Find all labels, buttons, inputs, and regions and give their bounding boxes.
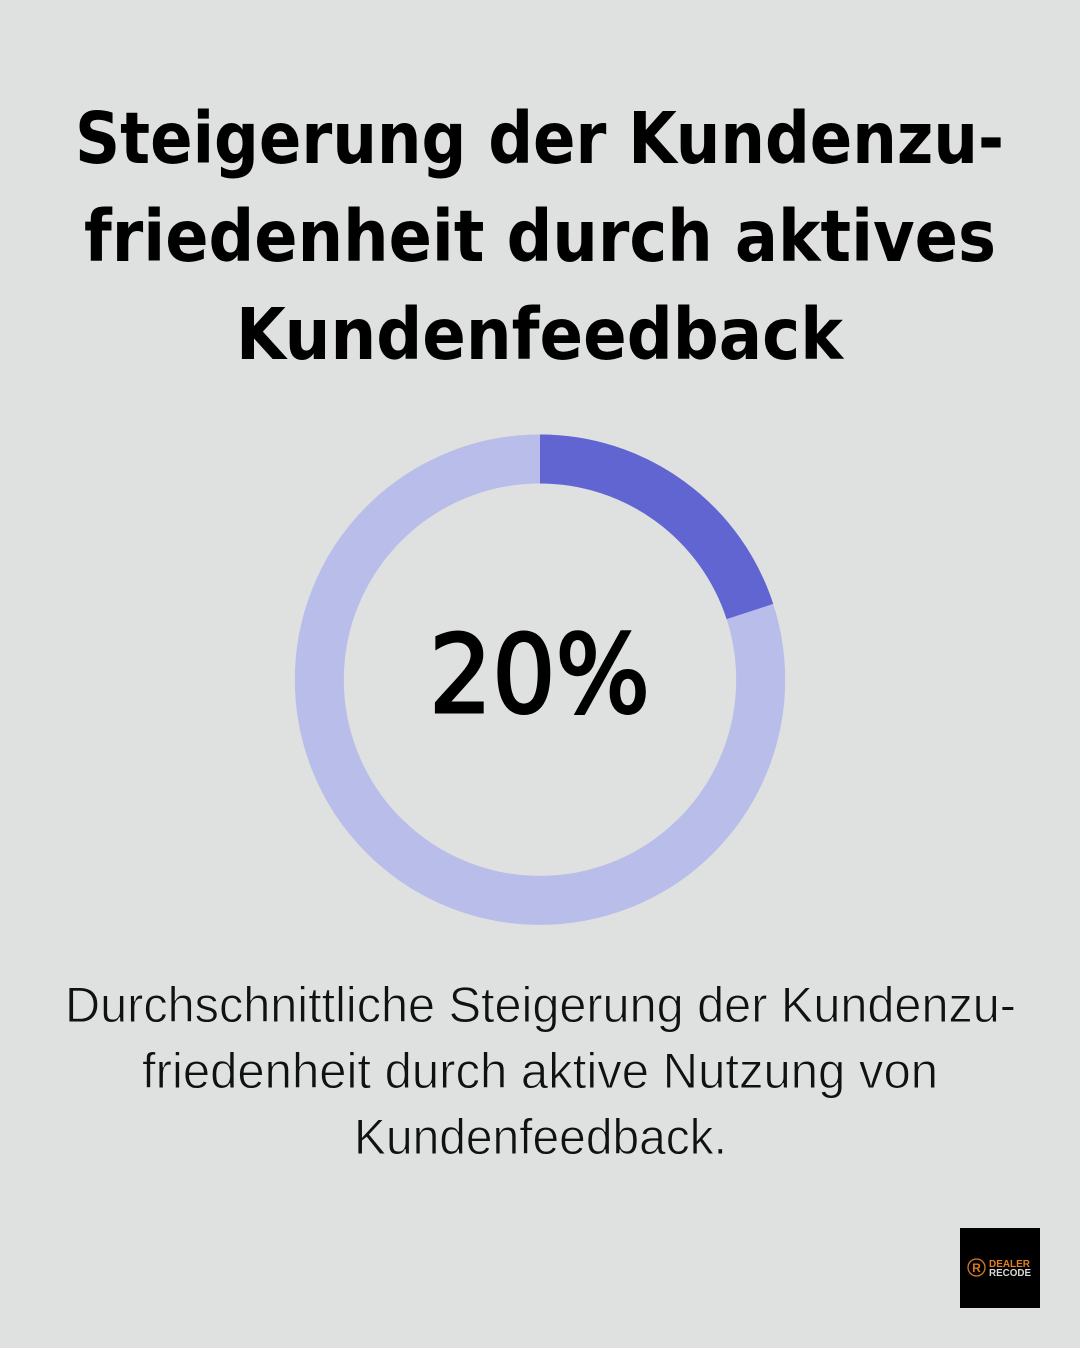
title — [75, 97, 1004, 376]
description: friedenheit durch aktive Nutzung von — [142, 1043, 938, 1099]
description: Durchschnittliche Steigerung der Kundenzu- — [65, 977, 1016, 1033]
title: Kundenfeedback — [236, 293, 845, 376]
donut track — [319, 459, 761, 900]
logo icon: R — [972, 1261, 981, 1275]
title: friedenheit durch aktives — [84, 195, 996, 278]
donut chart: 20% — [319, 459, 761, 900]
logo wordmark: DEALER — [989, 1259, 1031, 1270]
description: Kundenfeedback. — [354, 1109, 727, 1165]
logo: Dealer Recode — [960, 1228, 1040, 1308]
logo wordmark — [989, 1259, 1031, 1279]
logo wordmark: RECODE — [989, 1268, 1031, 1279]
donut highlighted segment — [540, 459, 750, 612]
description — [65, 977, 1016, 1165]
center value: 20% — [429, 613, 650, 738]
logo background — [960, 1228, 1040, 1308]
